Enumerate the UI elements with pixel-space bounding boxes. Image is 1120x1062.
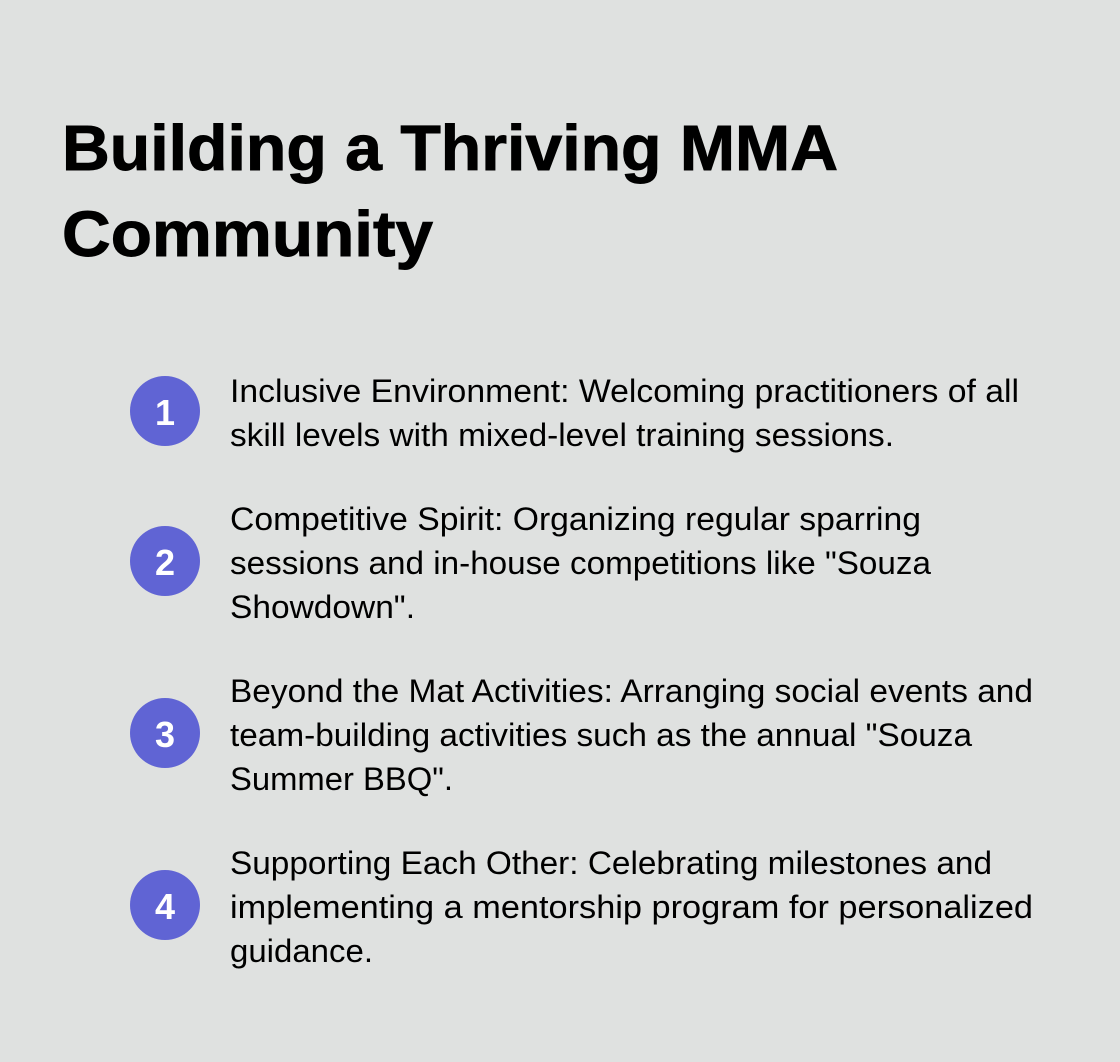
number badge 2: 2 bbox=[155, 542, 175, 583]
item 2 text: Competitive Spirit: Organizing regular sparring bbox=[230, 501, 921, 537]
item 2 text bbox=[230, 501, 931, 625]
item 4 text: Supporting Each Other: Celebrating milestones and bbox=[230, 845, 992, 881]
title: Community bbox=[62, 198, 433, 270]
number badge 1: 1 bbox=[155, 392, 175, 433]
title: Building a Thriving MMA bbox=[62, 112, 838, 184]
item 3 text: team-building activities such as the annual "Souza bbox=[230, 717, 972, 753]
item 1 text bbox=[230, 373, 1019, 453]
list item 1: inclusive environment bbox=[130, 373, 1019, 453]
item 3 text: Summer BBQ". bbox=[230, 761, 453, 797]
number badge 4: 4 bbox=[155, 886, 175, 927]
title bbox=[62, 112, 838, 270]
item 2 text: Showdown". bbox=[230, 589, 415, 625]
list item 2: competitive spirit bbox=[130, 501, 931, 625]
number badge 3 bbox=[130, 698, 200, 768]
item 4 text: guidance. bbox=[230, 933, 373, 969]
item 4 text bbox=[230, 845, 1033, 969]
item 3 text bbox=[230, 673, 1033, 797]
item 2 text: sessions and in-house competitions like "Souza bbox=[230, 545, 931, 581]
number badge 1 bbox=[130, 376, 200, 446]
list item 3: beyond the mat activities bbox=[130, 673, 1033, 797]
item 4 text: implementing a mentorship program for personalized bbox=[230, 889, 1033, 925]
item 1 text: skill levels with mixed-level training sessions. bbox=[230, 417, 894, 453]
list item 4: supporting each other bbox=[130, 845, 1033, 969]
item 3 text: Beyond the Mat Activities: Arranging social events and bbox=[230, 673, 1033, 709]
number badge 4 bbox=[130, 870, 200, 940]
number badge 3: 3 bbox=[155, 714, 175, 755]
item 1 text: Inclusive Environment: Welcoming practitioners of all bbox=[230, 373, 1019, 409]
number badge 2 bbox=[130, 526, 200, 596]
